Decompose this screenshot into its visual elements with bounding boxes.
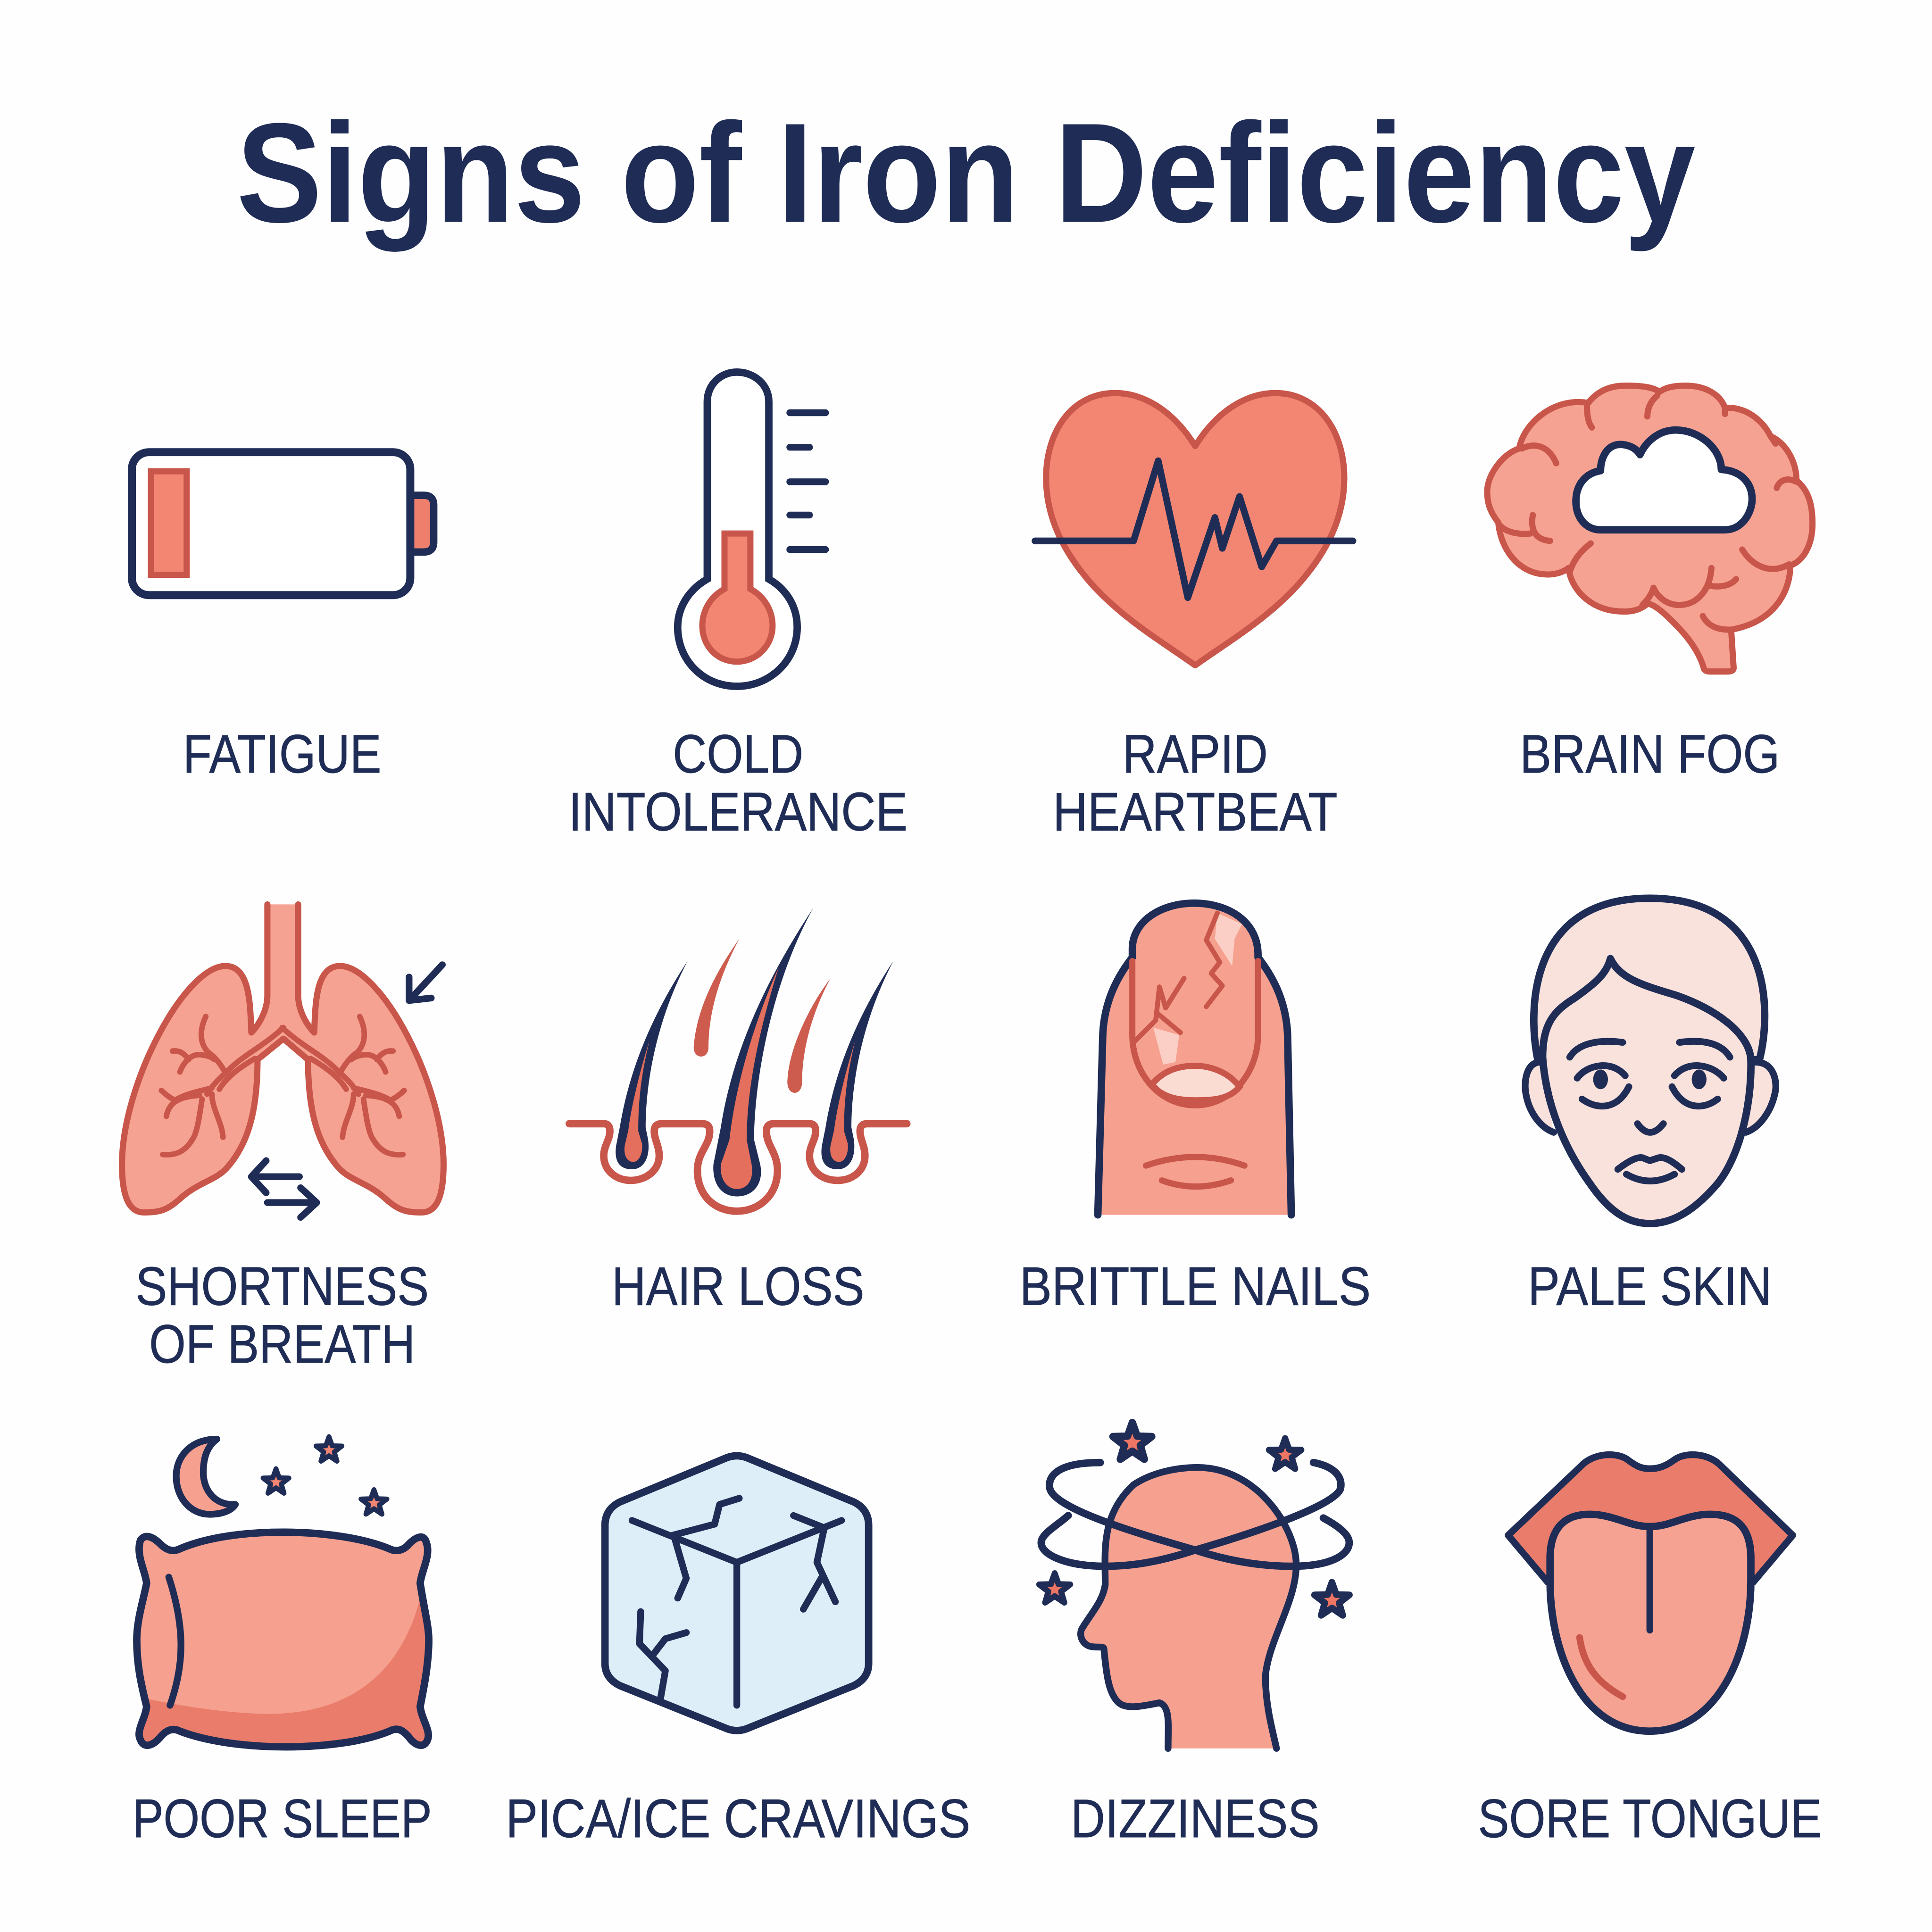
right lung bronchi [282,1016,404,1155]
label: hair loss: HAIR LOSS [612,1256,864,1316]
label: cold intolerance [569,724,908,842]
icon: hair follicles [569,908,907,1211]
icon: pale face [1525,898,1776,1224]
label: rapid heartbeat: HEARTBEAT [1053,782,1338,842]
panel: poor sleep [123,1437,443,1849]
label: rapid heartbeat: RAPID [1123,724,1268,784]
icon: brain with cloud [1487,386,1813,672]
label: pica / ice cravings: PICA/ICE CRAVINGS [506,1789,970,1849]
panel: shortness of breath [122,904,443,1374]
label: shortness of breath: SHORTNESS [135,1256,429,1316]
falling hair strands [694,939,831,1093]
icon: lips and tongue [1508,1455,1793,1731]
label: cold intolerance: COLD [673,724,803,784]
icon: finger with cracked nail [1098,903,1291,1215]
label: shortness of breath [135,1256,429,1374]
panel: brain fog [1487,386,1813,784]
label: rapid heartbeat [1053,724,1338,842]
label: poor sleep: POOR SLEEP [133,1789,432,1849]
icon: lungs with arrows [122,904,443,1217]
label: shortness of breath: OF BREATH [149,1314,415,1374]
label: fatigue: FATIGUE [183,724,381,784]
panel: cold intolerance [569,372,908,842]
icon: thermometer [678,372,825,686]
panel: pale skin [1525,898,1776,1316]
center hair [713,908,813,1196]
icon: pillow [133,1528,433,1751]
title: Signs of Iron Deficiency [237,93,1696,253]
icon: dizzy stars [1039,1423,1349,1616]
icon: heart with ECG [1035,393,1353,666]
panel: dizziness [1039,1423,1349,1849]
label: brittle nails: BRITTLE NAILS [1020,1256,1371,1316]
panel: sore tongue [1478,1455,1822,1849]
panel: brittle nails [1020,903,1371,1316]
icon: moon and stars [176,1437,387,1514]
icon: cracked ice cube [605,1456,869,1731]
icon: head in profile [1041,1463,1349,1749]
panel: rapid heartbeat [1035,393,1353,842]
panel: fatigue [132,452,434,784]
left hair [616,961,688,1169]
label: brain fog: BRAIN FOG [1520,724,1780,784]
label: dizziness: DIZZINESS [1071,1789,1320,1849]
label: sore tongue: SORE TONGUE [1478,1789,1822,1849]
left lung bronchi [161,1016,283,1155]
icon: low battery [132,452,434,595]
label: pale skin: PALE SKIN [1528,1256,1772,1316]
panel: pica / ice cravings [506,1456,970,1849]
panel: hair loss [569,908,907,1316]
label: cold intolerance: INTOLERANCE [569,782,908,842]
right hair [821,961,893,1169]
infographic [119,119,1820,1838]
icon: breath arrows [251,965,442,1217]
